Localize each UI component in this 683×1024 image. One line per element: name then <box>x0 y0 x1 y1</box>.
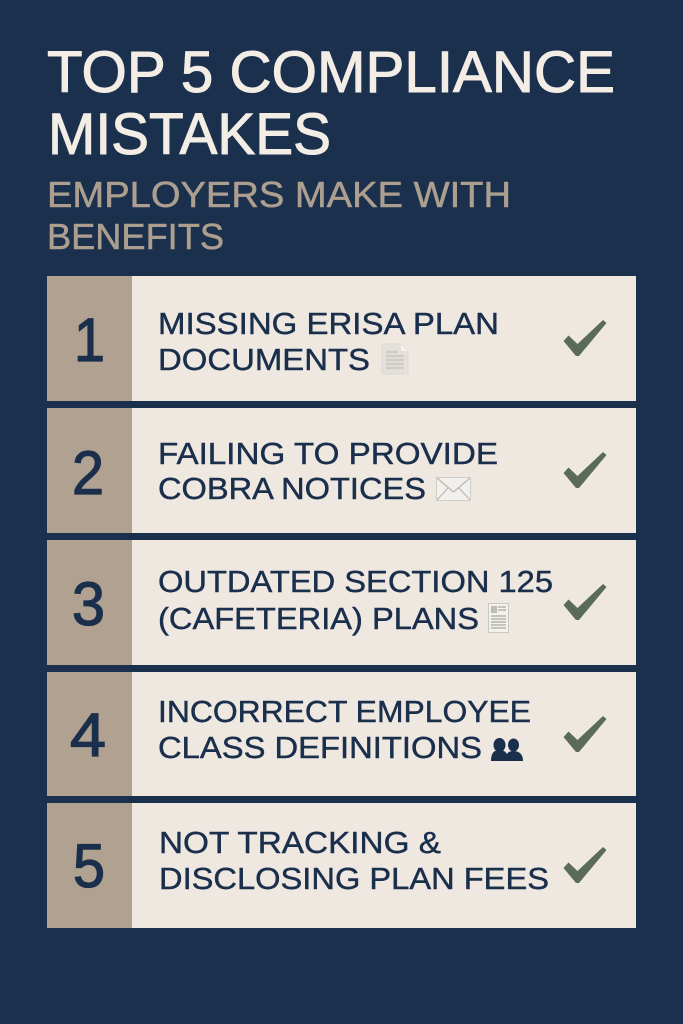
text: mistake 1: MISSING ERISA PLAN <box>158 306 499 341</box>
text: mistake 2: FAILING TO PROVIDE <box>158 436 498 471</box>
icon: check mark <box>564 584 606 620</box>
number 2: 2 <box>72 439 104 507</box>
subtitle <box>47 174 511 257</box>
text: mistake 3: (CAFETERIA) PLANS <box>158 601 479 636</box>
text: mistake 3 <box>158 564 553 636</box>
text: mistake 1: DOCUMENTS <box>158 342 370 377</box>
text: mistake 3: OUTDATED SECTION 125 <box>158 564 553 599</box>
icon: form document <box>488 604 508 632</box>
subtitle: BENEFITS <box>47 216 224 257</box>
title: TOP 5 COMPLIANCE <box>47 40 615 105</box>
icon: check mark <box>564 320 606 356</box>
text: mistake 1 <box>158 306 499 377</box>
icon: envelope <box>436 478 470 500</box>
subtitle: EMPLOYERS MAKE WITH <box>47 174 511 215</box>
text: mistake 2: COBRA NOTICES <box>158 471 426 506</box>
icon: check mark <box>564 847 606 883</box>
icon: document <box>382 344 408 374</box>
panel: mistake 4 <box>47 672 636 796</box>
text: mistake 4: INCORRECT EMPLOYEE <box>158 694 531 729</box>
text: mistake 2 <box>158 436 498 506</box>
panel: mistake 2 <box>47 408 636 533</box>
number 4: 4 <box>70 701 106 769</box>
text: mistake 5: NOT TRACKING & <box>159 825 441 860</box>
text: mistake 5: DISCLOSING PLAN FEES <box>159 861 549 896</box>
panel: mistake 1 <box>47 276 636 401</box>
title <box>47 40 615 167</box>
panel: mistake 5 <box>47 803 636 928</box>
panel: mistake 3 <box>47 540 636 665</box>
text: mistake 4: CLASS DEFINITIONS <box>158 730 482 765</box>
number 1: 1 <box>74 306 105 374</box>
number 3: 3 <box>72 570 105 638</box>
text: mistake 4 <box>158 694 531 765</box>
title: MISTAKES <box>48 102 331 167</box>
icon: check mark <box>564 452 606 488</box>
icon: check mark <box>564 716 606 752</box>
icon: people <box>491 738 523 761</box>
text: mistake 5 <box>159 825 549 896</box>
number 5: 5 <box>73 832 105 900</box>
